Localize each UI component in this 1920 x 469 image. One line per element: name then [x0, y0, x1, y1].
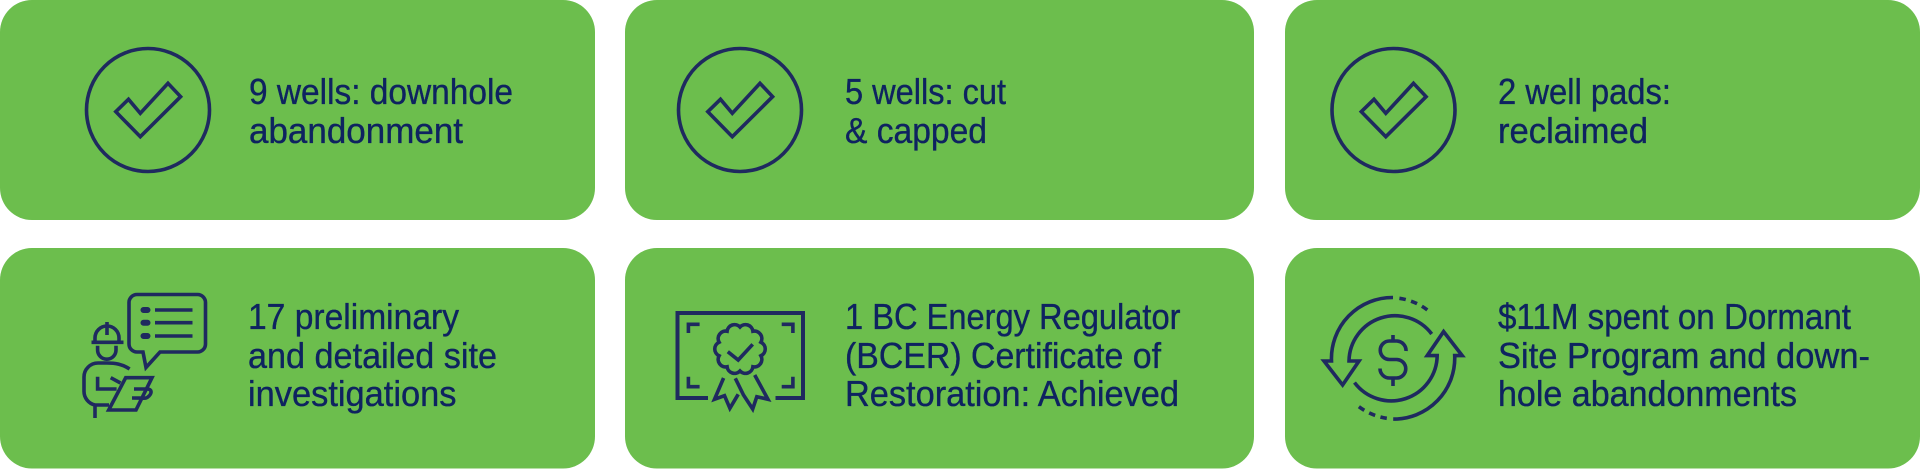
- panel: 2 well pads: [1285, 0, 1920, 220]
- text: 2 well pads: reclaimed: [1498, 110, 1648, 151]
- icon: certificate with seal: [678, 313, 803, 409]
- icon: check circle: [86, 48, 210, 172]
- text: 9 wells: [249, 71, 513, 151]
- panel: 5 wells: [625, 0, 1254, 220]
- panel: site investigations: [0, 248, 595, 468]
- text: 2 well pads: [1498, 71, 1671, 151]
- text: site investigations: 17 preliminary: [248, 296, 459, 337]
- text: 5 wells: & capped: [845, 110, 987, 151]
- panel: program spending: [1285, 248, 1920, 468]
- text: site investigations: [248, 296, 497, 414]
- text: certificate of restoration: (BCER) Certificate of: [845, 335, 1162, 376]
- text: program spending: [1498, 296, 1870, 414]
- icon: dollar with circular arrows: [1324, 297, 1462, 419]
- panel: 9 wells: [0, 0, 595, 220]
- icon: check circle: [678, 48, 802, 172]
- icon: check circle: [1332, 48, 1455, 172]
- text: program spending: Site Program and down-: [1498, 335, 1870, 376]
- text: site investigations: investigations: [248, 373, 456, 414]
- card background: [1285, 248, 1920, 468]
- card background: [0, 248, 595, 468]
- text: certificate of restoration: [845, 296, 1181, 414]
- text: 5 wells: [845, 71, 1006, 151]
- icon: worker with speech bubble: [84, 294, 206, 418]
- text: site investigations: and detailed site: [248, 335, 497, 376]
- text: certificate of restoration: 1 BC Energy Regulator: [845, 296, 1181, 337]
- text: 9 wells: abandonment: [249, 110, 463, 151]
- card background: [0, 0, 595, 220]
- text: program spending: $11M spent on Dormant: [1498, 296, 1851, 337]
- text: program spending: hole abandonments: [1498, 373, 1797, 414]
- card background: [1285, 0, 1920, 220]
- text: 5 wells: 5 wells: cut: [845, 71, 1006, 112]
- card background: [625, 248, 1254, 468]
- card background: [625, 0, 1254, 220]
- panel: certificate of restoration: [625, 248, 1254, 468]
- text: certificate of restoration: Restoration: Achieved: [845, 373, 1179, 414]
- text: 9 wells: 9 wells: downhole: [249, 71, 513, 112]
- text: 2 well pads: 2 well pads:: [1498, 71, 1671, 112]
